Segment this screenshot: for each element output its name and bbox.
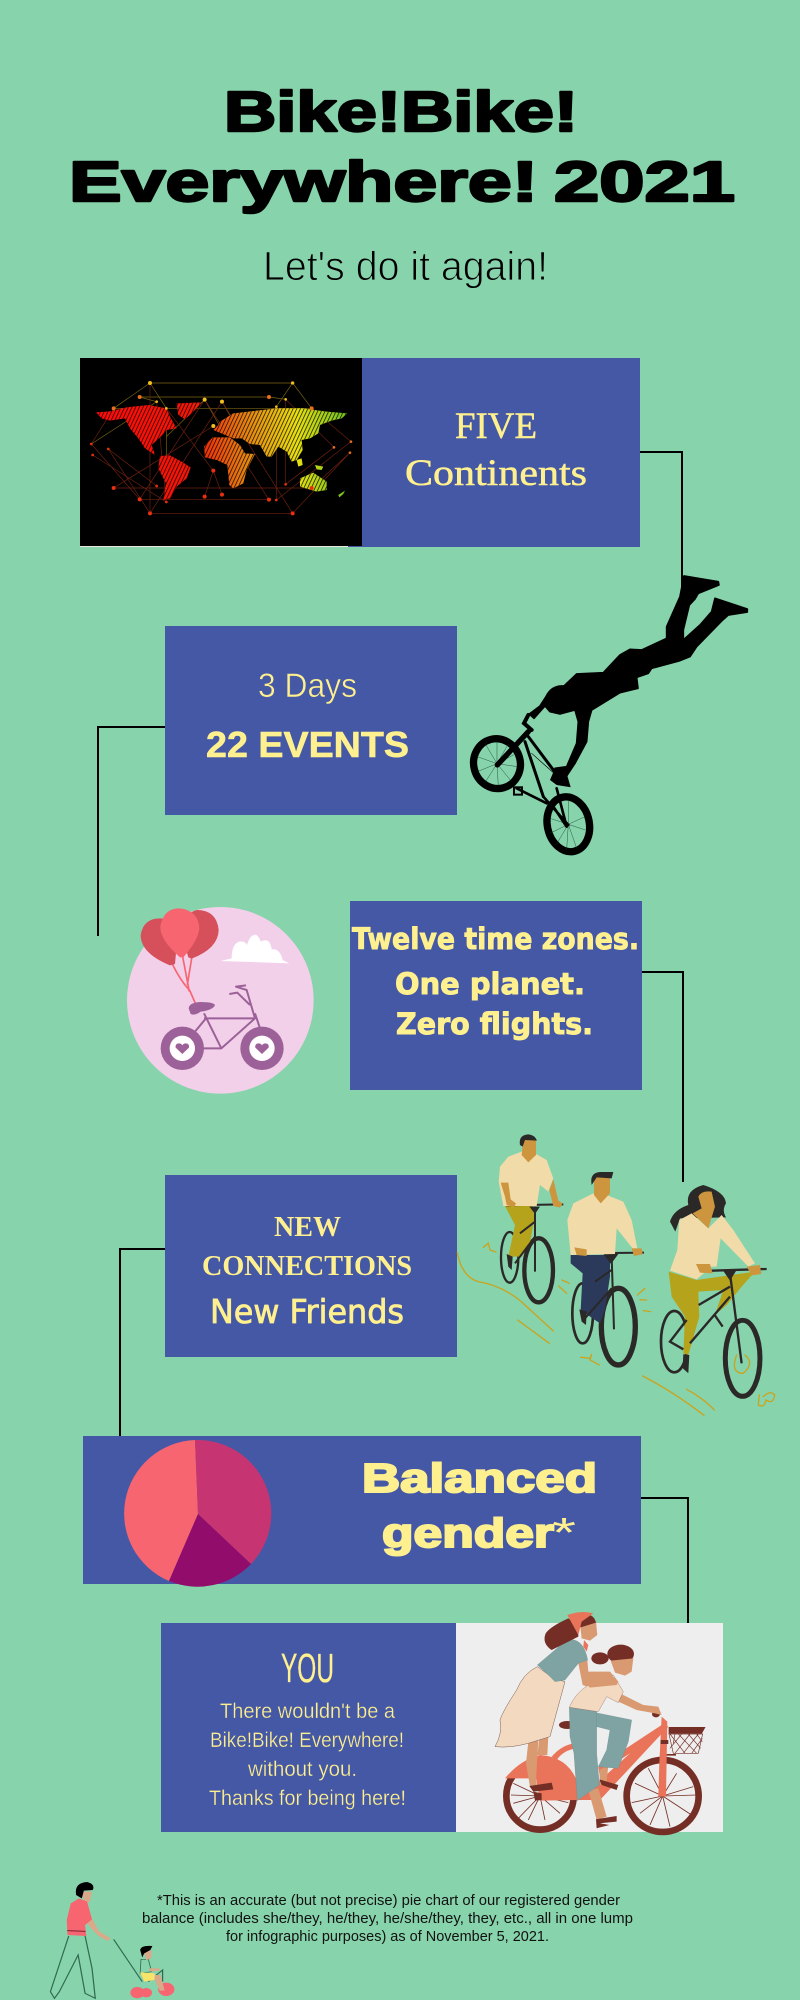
title: Bike!Bike! [224, 80, 578, 144]
cyclist three [661, 1185, 767, 1396]
speed scribbles [457, 1243, 775, 1415]
title: Everywhere! [69, 150, 538, 214]
title: 2021 [554, 150, 735, 214]
panel: twelve time zones: One planet. [395, 967, 585, 1001]
balanced gender label [362, 1455, 597, 1556]
footnote: balance (includes she/they, he/they, he/she/they, they, etc., all in one lump [142, 1910, 633, 1927]
panel: new connections: NEW [274, 1211, 341, 1243]
thank you message: Thanks for being here! [209, 1787, 406, 1810]
panel: new connections: CONNECTIONS [202, 1251, 412, 1282]
illustration: three cyclists [457, 1134, 775, 1415]
child on tricycle [130, 1946, 174, 1998]
illustration: parent pushing child on tricycle [50, 1882, 174, 1998]
thank you message: Bike!Bike! Everywhere! [210, 1729, 404, 1752]
panel: 22 events: 3 Days [258, 667, 357, 705]
panel text: five continents: FIVE [455, 406, 537, 447]
panel: twelve time zones: Twelve time zones. [352, 922, 639, 956]
panel: you [161, 1623, 456, 1832]
thank you message [209, 1700, 406, 1810]
icon: stunt bike silhouette [468, 576, 747, 856]
illustration: two women on a bike [456, 1612, 723, 1832]
girl pedalling [569, 1645, 662, 1828]
bicycle [505, 1711, 705, 1832]
cyclist two [567, 1172, 644, 1365]
panel: you: YOU [281, 1645, 334, 1691]
panel: twelve time zones: Zero flights. [396, 1007, 593, 1041]
panel: twelve time zones [350, 901, 642, 1090]
cyclist one [499, 1134, 563, 1302]
thank you message: There wouldn't be a [220, 1700, 395, 1723]
footnote [142, 1892, 633, 1945]
balanced gender label: gender [382, 1510, 554, 1556]
pie chart [124, 1440, 271, 1587]
panel: five continents [80, 358, 640, 547]
footnote: for infographic purposes) as of November 5, 2021. [226, 1928, 549, 1945]
world network map [80, 358, 362, 547]
footnote: *This is an accurate (but not precise) pie chart of our registered gender [157, 1892, 620, 1909]
connector: continents to stunt rider [640, 452, 682, 594]
basket [669, 1727, 705, 1753]
panel text: five continents: Continents [405, 453, 587, 494]
icon: balloon bike in pink circle [127, 907, 314, 1094]
connector: gender panel to you panel [641, 1498, 688, 1623]
panel: 22 events: 22 EVENTS [206, 724, 409, 765]
panel text: five continents [405, 406, 587, 494]
connector: connections to gender panel [120, 1249, 165, 1436]
subtitle: Let's do it again! [263, 243, 548, 289]
thank you message: without you. [247, 1758, 357, 1781]
balanced gender label: * [552, 1509, 576, 1556]
panel: 22 events [165, 626, 457, 815]
woman standing [495, 1612, 618, 1801]
panel: new connections: New Friends [210, 1292, 404, 1331]
connector: events to balloon bike [98, 727, 165, 936]
panel: balanced gender [83, 1436, 641, 1587]
panel: new connections [165, 1175, 457, 1357]
connector: time zones to cyclists [642, 972, 683, 1182]
title [69, 80, 735, 214]
balanced gender label: Balanced [362, 1455, 597, 1501]
